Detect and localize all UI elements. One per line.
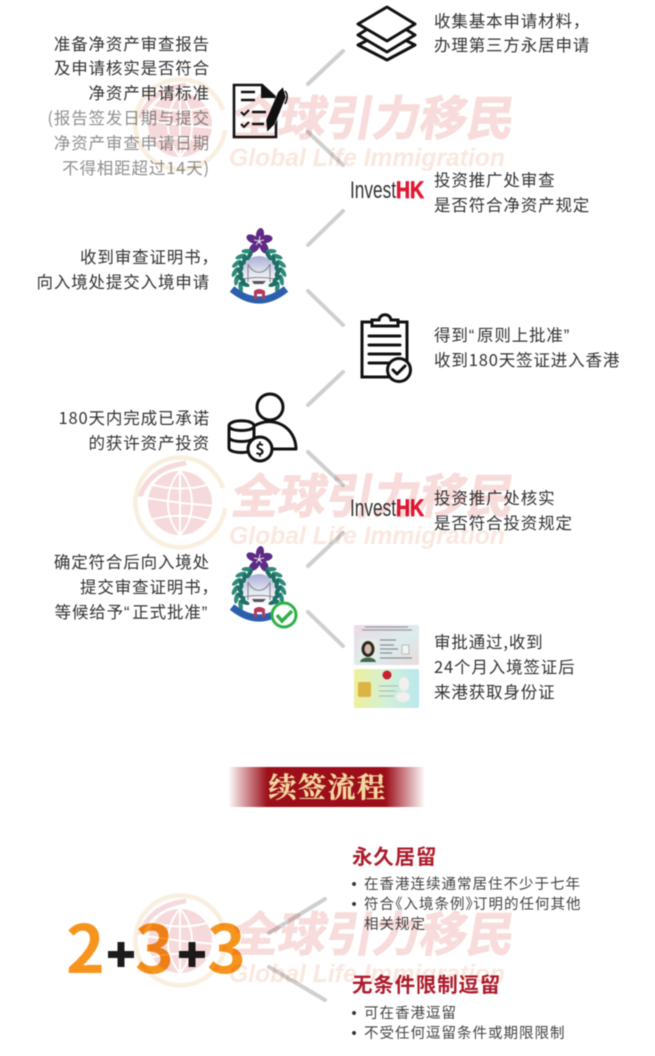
panel: unconditional stay: •	[352, 1006, 357, 1022]
logo: InvestHK: HK	[396, 177, 425, 204]
icon: immigration department emblem	[230, 227, 288, 300]
panel: unconditional stay: 不受任何逗留条件或期限限制	[364, 1022, 566, 1043]
text: asset review preparation: 净资产审查申请日期	[54, 130, 210, 154]
text: asset review preparation: (报告签发日期与提交	[47, 105, 210, 129]
logo: InvestHK: Invest	[350, 177, 396, 204]
icon: layered stack	[358, 7, 415, 60]
timeline connector lines	[308, 51, 343, 646]
text: submit certificate: 等候给予“正式批准”	[55, 599, 210, 623]
renewal connector lines	[269, 899, 325, 1000]
text: complete investment: 180天内完成已承诺	[59, 405, 210, 429]
panel: permanent residence: 永久居留	[352, 840, 437, 870]
panel: unconditional stay: 可在香港逗留	[364, 1002, 457, 1023]
panel: permanent residence: •	[352, 877, 357, 893]
text: collect materials: 办理第三方永居申请	[434, 32, 590, 56]
text: complete investment: 的获许资产投资	[89, 430, 210, 454]
text: submit entry application: 收到审查证明书，	[80, 244, 210, 268]
text: approval and ID: 来港获取身份证	[434, 679, 555, 703]
watermark: bottom	[135, 895, 522, 988]
icon: emblem with green check	[230, 545, 296, 627]
panel: permanent residence: 相关规定	[364, 913, 426, 934]
watermark: top	[135, 79, 522, 172]
icon: investor with coins	[229, 394, 296, 461]
text: collect materials: 收集基本申请材料，	[434, 8, 581, 32]
number: 2+3+3: 3	[207, 897, 246, 993]
text: InvestHK verification: 是否符合投资规定	[434, 510, 573, 534]
icon: document and pen	[234, 85, 287, 137]
text: approval and ID: 24个月入境签证后	[434, 654, 575, 678]
number: 2+3+3	[66, 897, 246, 993]
panel: permanent residence: •	[352, 897, 357, 913]
panel: permanent residence	[352, 840, 582, 934]
icon: investor with coins: $	[255, 436, 265, 460]
text: approval and ID: 审批通过,收到	[434, 629, 544, 653]
watermark: middle	[135, 457, 522, 550]
watermark: top: 全球引力移民	[228, 80, 522, 149]
panel: permanent residence: 在香港连续通常居住不少于七年	[364, 873, 581, 894]
text: asset review preparation	[47, 31, 210, 179]
panel: unconditional stay: •	[352, 1026, 357, 1042]
number: 2+3+3: 2	[66, 897, 105, 993]
icon: clipboard with check	[362, 315, 410, 382]
watermark: bottom: Global Life Immigration	[229, 960, 505, 988]
text: submit certificate: 提交审查证明书，	[80, 574, 210, 598]
text: InvestHK review: 是否符合净资产规定	[434, 192, 590, 216]
watermark: middle: Global Life Immigration	[229, 522, 505, 550]
text: InvestHK review: 投资推广处审查	[434, 167, 555, 191]
text: asset review preparation: 净资产申请标准	[89, 80, 210, 104]
text: approval in principle: 得到“原则上批准”	[434, 322, 572, 346]
text: submit entry application	[36, 244, 210, 293]
text: submit entry application: 向入境处提交入境申请	[36, 269, 210, 293]
watermark: top: Global Life Immigration	[229, 144, 505, 172]
text: approval in principle	[434, 322, 620, 371]
watermark: bottom: 全球引力移民	[228, 896, 522, 965]
panel: unconditional stay: 无条件限制逗留	[352, 968, 501, 998]
number: 2+3+3: 3	[135, 897, 174, 993]
text: asset review preparation: 及申请核实是否符合	[54, 55, 210, 79]
panel: unconditional stay	[352, 968, 566, 1043]
text: asset review preparation: 准备净资产审查报告	[54, 31, 210, 55]
text: InvestHK review	[434, 167, 590, 216]
text: InvestHK verification	[434, 485, 573, 534]
text: asset review preparation: 不得相距超过14天)	[62, 155, 210, 179]
watermark: middle: 全球引力移民	[228, 458, 522, 527]
text: approval and ID	[434, 629, 575, 703]
heading banner: renewal process: 续签流程	[268, 766, 387, 806]
logo: InvestHK: Invest	[350, 495, 396, 522]
image: ID card pair	[354, 625, 419, 708]
panel: permanent residence: 符合《入境条例》订明的任何其他	[364, 893, 582, 914]
logo: InvestHK: HK	[396, 495, 425, 522]
text: collect materials	[434, 8, 590, 56]
text: approval in principle: 收到180天签证进入香港	[434, 347, 620, 371]
text: complete investment	[59, 405, 210, 454]
heading banner: renewal process	[228, 766, 425, 807]
text: submit certificate: 确定符合后向入境处	[54, 549, 210, 573]
text: submit certificate	[54, 549, 210, 623]
text: InvestHK verification: 投资推广处核实	[434, 485, 555, 509]
